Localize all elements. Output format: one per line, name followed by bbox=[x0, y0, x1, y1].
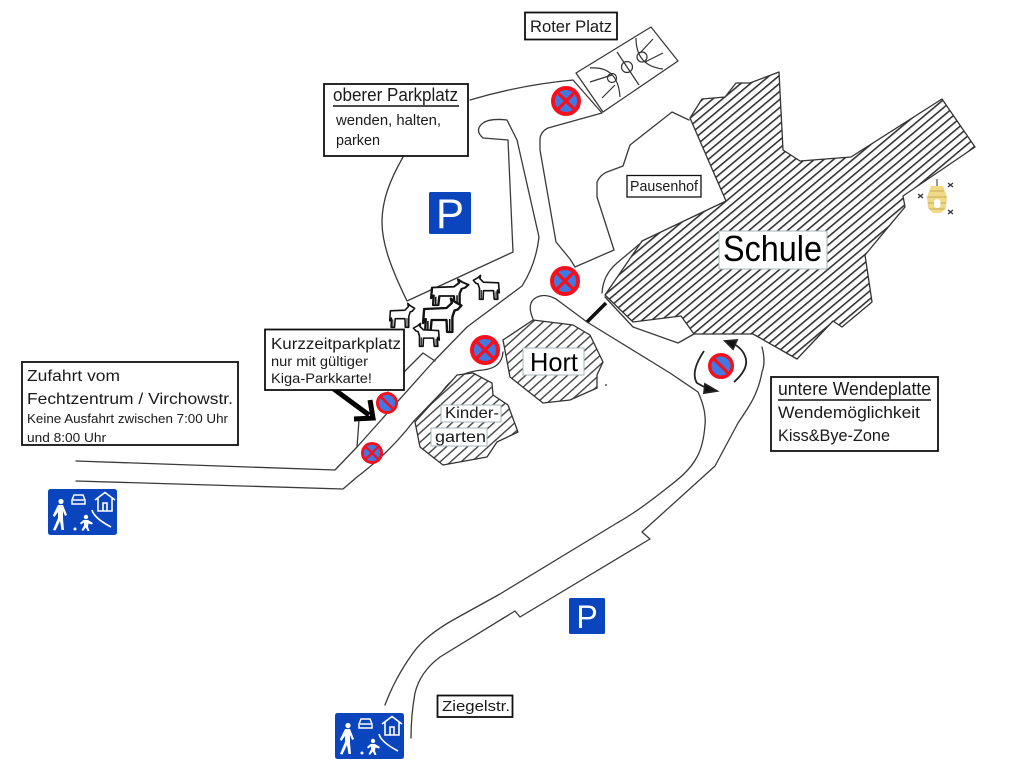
label: Kindergarten: Kinder- bbox=[445, 405, 499, 422]
label: Kurzzeitparkplatz: nur mit gültiger bbox=[271, 354, 369, 369]
label: Kindergarten: garten bbox=[435, 429, 486, 446]
label: Ziegelstr.: Ziegelstr. bbox=[442, 698, 510, 715]
label: Hort: Hort bbox=[530, 347, 579, 377]
parking sign lower bbox=[569, 598, 605, 635]
parking sign upper bbox=[429, 190, 471, 237]
label: Roter Platz bbox=[525, 12, 617, 40]
label: untere Wendeplatte bbox=[771, 377, 938, 451]
label: Schule: Schule bbox=[723, 228, 822, 269]
label: untere Wendeplatte: Wendemöglichkeit bbox=[778, 403, 920, 422]
icon: beehive bbox=[918, 179, 953, 214]
label: Kurzzeitparkplatz: Kiga-Parkkarte! bbox=[271, 371, 372, 386]
road: turning loop and lower road to Ziegelstrasse bbox=[385, 242, 764, 738]
label: Zufahrt: Keine Ausfahrt zwischen 7:00 Uhr bbox=[27, 412, 228, 426]
label: untere Wendeplatte: Kiss&Bye-Zone bbox=[778, 426, 890, 445]
short-term parking outline bbox=[357, 353, 435, 447]
living street sign left bbox=[48, 489, 117, 535]
label: Pausenhof: Pausenhof bbox=[630, 179, 699, 195]
label: Kindergarten bbox=[431, 405, 501, 446]
parking sign upper: P bbox=[436, 190, 464, 237]
label: Roter Platz: Roter Platz bbox=[530, 17, 612, 36]
road: Zufahrt and upper access road bbox=[76, 80, 689, 489]
living street sign bottom bbox=[335, 713, 404, 759]
turning arrows bbox=[695, 340, 746, 393]
small dot bbox=[605, 384, 607, 386]
goats bbox=[390, 275, 499, 346]
building: Kindergarten bbox=[415, 373, 518, 465]
label: Kurzzeitparkplatz bbox=[265, 330, 404, 390]
label: oberer Parkplatz bbox=[324, 84, 468, 156]
label: Pausenhof bbox=[627, 176, 701, 197]
label: oberer Parkplatz: parken bbox=[336, 133, 380, 149]
label: Zufahrt: Zufahrt vom bbox=[27, 368, 120, 385]
label: Zufahrt bbox=[22, 362, 238, 445]
label: untere Wendeplatte: untere Wendeplatte bbox=[778, 379, 931, 399]
building: Schule bbox=[605, 72, 975, 359]
arrow to Kurzzeitparkplatz bbox=[331, 387, 373, 419]
no-parking signs bbox=[362, 88, 732, 463]
label: Zufahrt: und 8:00 Uhr bbox=[27, 431, 106, 445]
label: oberer Parkplatz: oberer Parkplatz bbox=[333, 85, 458, 105]
label: oberer Parkplatz: wenden, halten, bbox=[335, 113, 441, 129]
barrier: thick bar at school entrance bbox=[587, 303, 606, 322]
sports court: Roter Platz bbox=[576, 27, 678, 112]
label: Zufahrt: Fechtzentrum / Virchowstr. bbox=[27, 391, 233, 408]
building: Hort bbox=[503, 320, 603, 403]
label: Ziegelstr. bbox=[438, 696, 512, 717]
label: Kurzzeitparkplatz: Kurzzeitparkplatz bbox=[271, 336, 401, 353]
parking sign lower: P bbox=[576, 599, 598, 635]
